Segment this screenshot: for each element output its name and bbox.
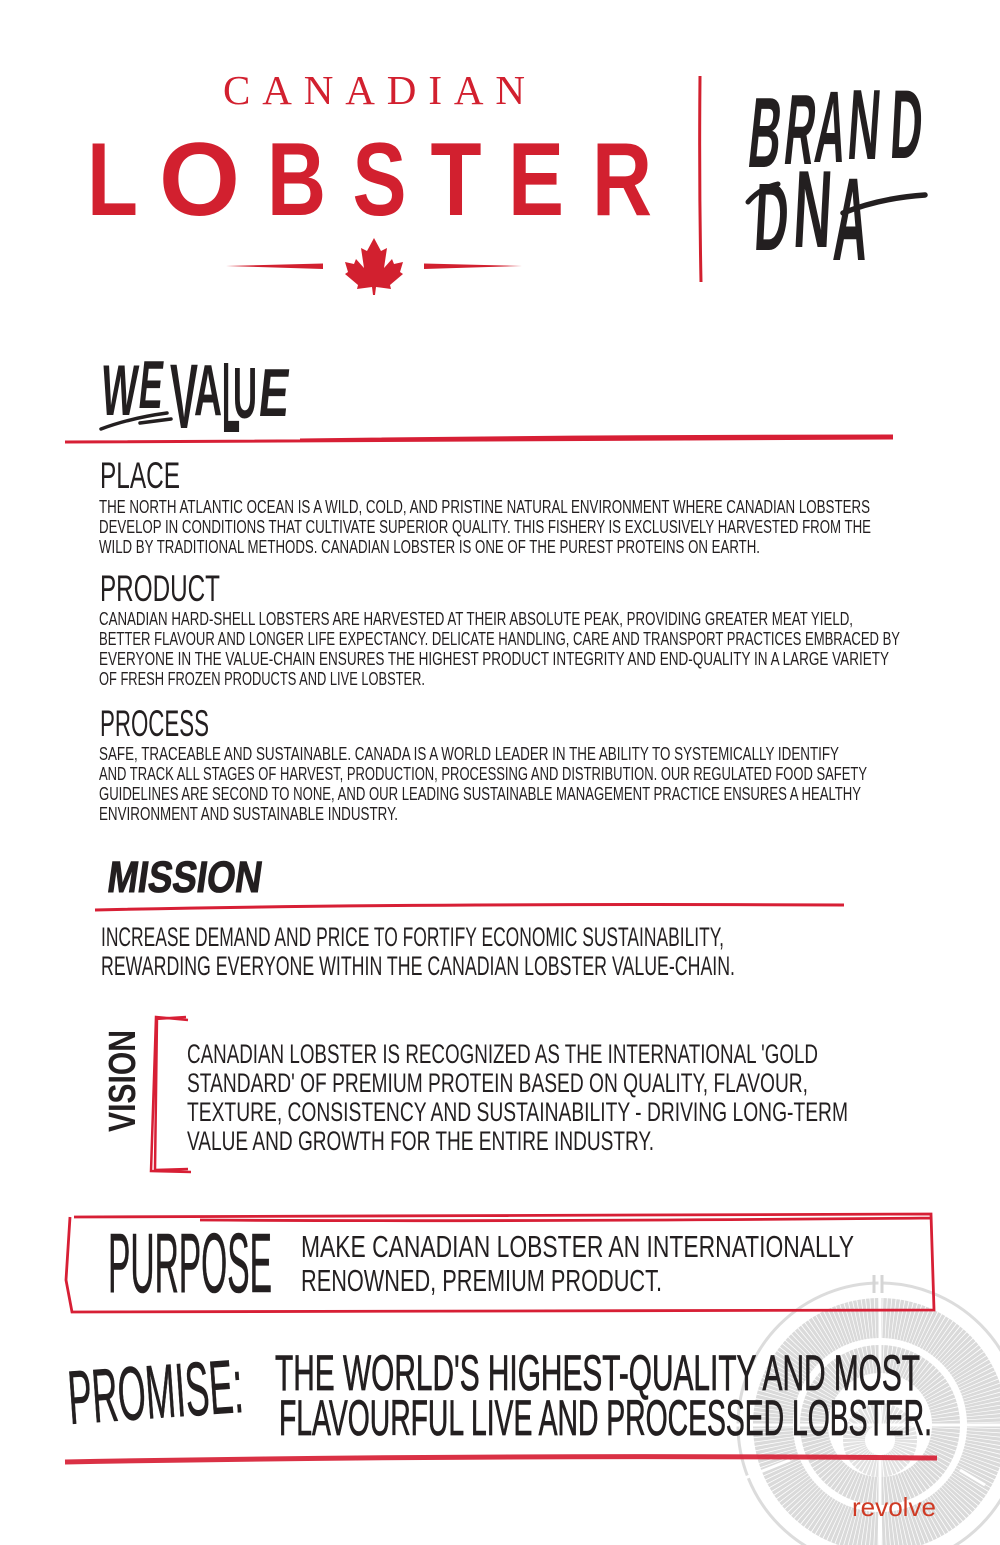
heading: Place: PLACE — [100, 455, 180, 496]
heading: Brand DNA: A — [811, 69, 851, 184]
divider: Mission underline — [95, 905, 844, 910]
logo rule right — [424, 264, 522, 269]
heading: Brand DNA — [744, 69, 926, 286]
panel: Purpose — [66, 1214, 934, 1312]
logo rule left — [226, 264, 323, 269]
logo word: Lobster: T — [430, 122, 482, 238]
heading: Brand DNA: B — [744, 77, 787, 189]
icon: grey wheel watermark — [735, 1275, 1000, 1545]
logo word: Lobster: L — [87, 122, 138, 238]
text block: Purpose: RENOWNED, PREMIUM PRODUCT. — [301, 1263, 662, 1298]
section: Process — [99, 703, 867, 824]
text block: Process body — [99, 744, 867, 824]
panel: Promise: PROMISE: — [65, 1344, 246, 1441]
heading: We Value: L — [222, 342, 240, 454]
logo word: Lobster: E — [508, 122, 564, 238]
icon: maple leaf — [345, 238, 403, 295]
heading: Brand DNA: A — [831, 154, 872, 286]
heading: We Value: W — [99, 351, 140, 431]
bracket: Vision — [151, 1017, 191, 1172]
text block: Product body: OF FRESH FROZEN PRODUCTS AND LIVE LOBSTER. — [99, 669, 425, 689]
logo: Canadian Lobster — [87, 67, 652, 295]
text block: Product body — [99, 609, 900, 689]
logo word: Canadian: CANADIAN — [223, 67, 525, 113]
heading: Process: PROCESS — [100, 703, 209, 744]
text block: Purpose — [301, 1229, 854, 1298]
text block: Place body: WILD BY TRADITIONAL METHODS. CANADIAN LOBSTER IS ONE OF THE PUREST PROTEINS ON EARTH. — [99, 537, 760, 557]
divider: Promise underline — [65, 1457, 937, 1462]
box: Purpose outline — [66, 1214, 934, 1312]
logo word: Lobster: S — [352, 122, 406, 238]
panel: Promise — [65, 1344, 937, 1462]
vertical divider — [700, 76, 701, 282]
logo word: Lobster — [87, 122, 652, 238]
heading: We Value — [99, 342, 293, 454]
text block: Process body: ENVIRONMENT AND SUSTAINABLE INDUSTRY. — [99, 804, 398, 824]
heading: We Value: A — [194, 351, 222, 431]
heading: We Value: E — [135, 347, 167, 423]
section: Product — [99, 568, 900, 689]
heading: We Value: V — [170, 346, 198, 448]
logo word: Lobster: O — [159, 122, 240, 238]
text block: Place body — [99, 497, 871, 557]
heading: Brand DNA: D — [752, 164, 792, 271]
logo: Revolve: revolve — [852, 1492, 936, 1522]
heading: Brand DNA: N — [791, 148, 835, 271]
panel: Purpose: PURPOSE — [108, 1216, 272, 1310]
heading: We Value: U — [233, 354, 257, 434]
heading: We Value: E — [255, 355, 293, 431]
text block: Promise — [275, 1345, 932, 1446]
section: Place — [99, 455, 871, 557]
logo word: Lobster: R — [592, 122, 652, 238]
text: D — [888, 69, 926, 179]
heading: Vision: VISION — [102, 1030, 144, 1132]
text block: Mission — [101, 922, 735, 981]
divider: We Value underline — [65, 436, 893, 442]
logo word: Lobster: B — [267, 122, 326, 238]
heading: Brand DNA: N — [844, 69, 884, 181]
heading: Brand DNA: R — [780, 74, 821, 186]
text block: Vision — [187, 1039, 848, 1156]
heading: Product: PRODUCT — [100, 568, 220, 609]
heading: Mission: MISSION — [105, 853, 265, 902]
text block: Vision: VALUE AND GROWTH FOR THE ENTIRE INDUSTRY. — [187, 1126, 654, 1156]
